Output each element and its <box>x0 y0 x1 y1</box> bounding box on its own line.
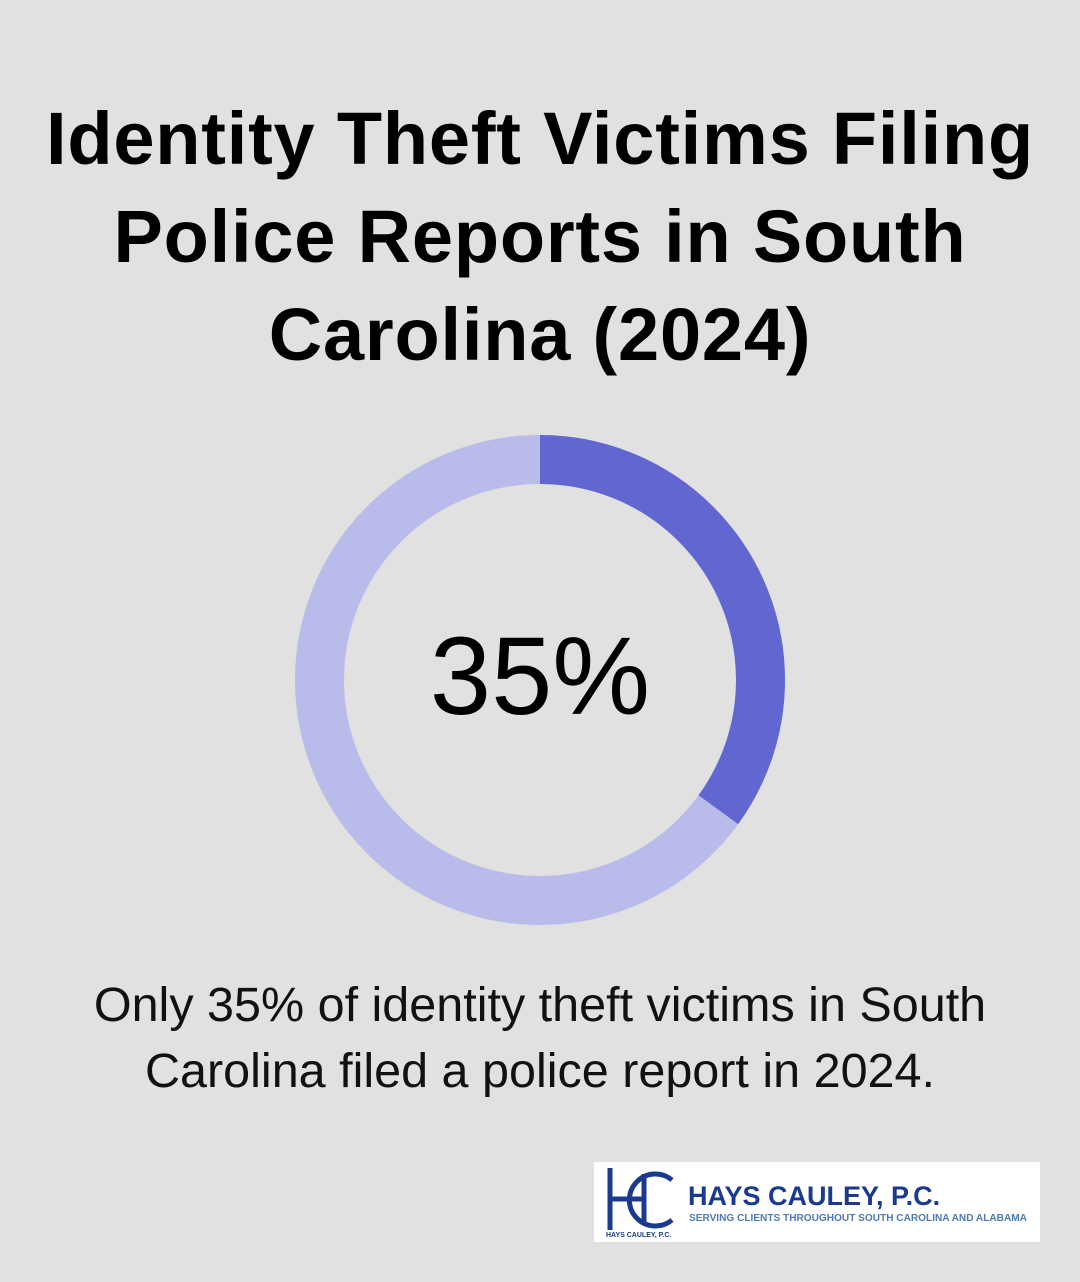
logo: HAYS CAULEY, P.C. <box>688 1181 940 1211</box>
description: Carolina filed a police report in 2024. <box>145 1044 935 1098</box>
icon: HC monogram <box>608 1168 674 1230</box>
title: Identity Theft Victims Filing <box>46 97 1034 180</box>
title <box>46 97 1034 376</box>
logo: SERVING CLIENTS THROUGHOUT SOUTH CAROLINA AND ALABAMA <box>689 1213 1027 1224</box>
title: Carolina (2024) <box>269 293 811 376</box>
title: Police Reports in South <box>113 195 967 278</box>
description: Only 35% of identity theft victims in South <box>94 978 986 1032</box>
description <box>94 978 986 1098</box>
logo: HAYS CAULEY, P.C. <box>606 1232 671 1239</box>
logo <box>594 1162 1040 1242</box>
donut chart: 35% <box>430 615 650 738</box>
